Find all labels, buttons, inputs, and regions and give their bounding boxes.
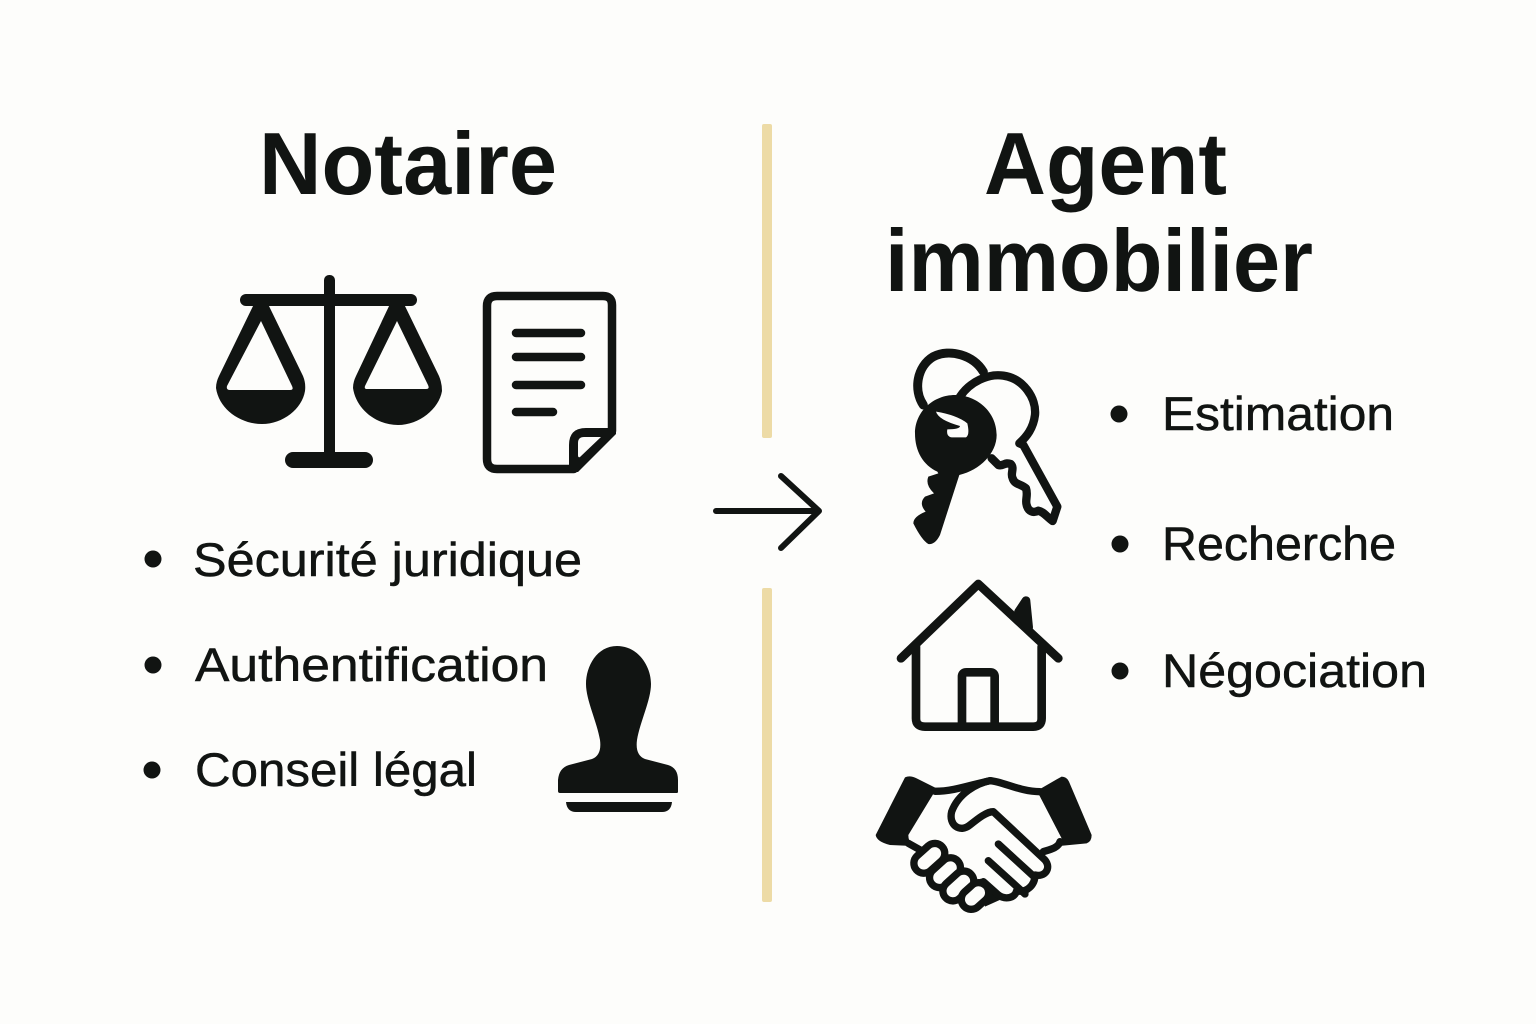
- item: Authentification: Authentification: [195, 638, 548, 691]
- icon: document: [487, 296, 616, 472]
- list: agent immobilier: [1110, 387, 1427, 697]
- heading: Agent immobilier: Agent: [984, 114, 1227, 213]
- item: Estimation: Estimation: [1162, 387, 1394, 440]
- item: Recherche: Recherche: [1162, 517, 1396, 570]
- item: Conseil légal: Conseil légal: [195, 743, 477, 796]
- arrow: [716, 476, 819, 548]
- heading: Notaire: Notaire: [259, 114, 557, 213]
- item: Négociation: Négociation: [1162, 644, 1427, 697]
- item: Sécurité juridique: Sécurité juridique: [193, 533, 582, 586]
- icon: handshake: [876, 776, 1092, 913]
- icon: keys: [913, 353, 1057, 544]
- icon: stamp: [558, 646, 678, 812]
- divider: lower: [762, 588, 772, 902]
- divider: upper: [762, 124, 772, 438]
- list: notaire: [144, 533, 582, 796]
- icon: house: [901, 584, 1058, 727]
- heading: Agent immobilier: immobilier: [885, 211, 1313, 310]
- heading: Agent immobilier: [885, 114, 1313, 310]
- icon: scales of justice: [216, 275, 442, 468]
